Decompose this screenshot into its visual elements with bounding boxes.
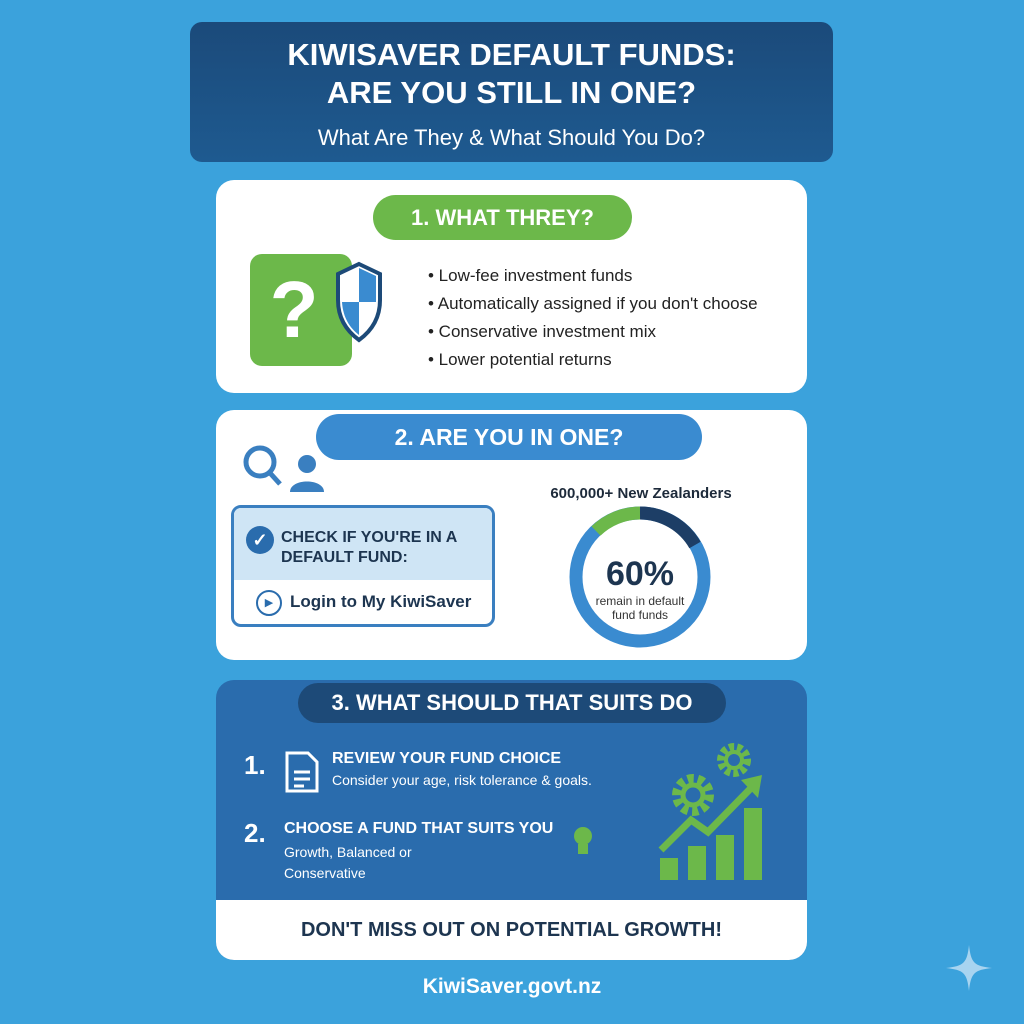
step 2: 2. [244,818,266,848]
panel 3: what should you do: Conservative [284,865,366,881]
panel 1: what are they [216,180,807,393]
check box: CHECK IF YOU'RE IN A [281,529,457,546]
title banner [190,22,833,162]
login link [256,590,282,616]
title [287,37,736,110]
bullet list [428,266,758,369]
stat label: 600,000+ New Zealanders [550,485,732,502]
donut chart [570,506,710,648]
bullet list: • Conservative investment mix [428,322,656,341]
heading pill 3 [298,683,726,723]
donut chart: 60% [606,555,674,593]
heading pill 1 [373,195,632,240]
icon: question mark [250,254,352,366]
panel 2: are you in one [216,410,807,660]
icon: check: ✓ [252,530,268,550]
bullet list: • Automatically assigned if you don't choose [428,294,758,313]
heading pill 3: 3. WHAT SHOULD THAT SUITS DO [332,690,692,715]
panel 3: what should you do: Consider your age, risk tolerance & goals. [332,772,592,788]
icon: document [286,752,318,792]
login link: ▶ [265,597,273,609]
icon: check [246,526,274,554]
step 1: 1. [244,750,266,780]
subtitle: What Are They & What Should You Do? [318,125,705,150]
donut chart: remain in default [596,594,685,608]
footer callout [216,900,807,960]
icon: question mark: ? [270,265,318,354]
footer callout: DON'T MISS OUT ON POTENTIAL GROWTH! [301,919,722,941]
icon: shield [336,262,382,342]
title: ARE YOU STILL IN ONE? [327,75,696,110]
bullet list: • Lower potential returns [428,350,612,369]
check box [231,505,495,627]
heading pill 2 [316,414,702,460]
icon: growth chart with gears [658,743,762,880]
panel 3: what should you do [216,680,807,960]
icon: lightbulb [574,827,592,854]
check box: DEFAULT FUND: [281,549,408,566]
panel 3: what should you do: REVIEW YOUR FUND CHOICE [332,750,561,767]
icon: sparkle [946,946,992,990]
heading pill 2: 2. ARE YOU IN ONE? [395,424,623,450]
bullet list: • Low-fee investment funds [428,266,632,285]
panel 3: what should you do: CHOOSE A FUND THAT SUITS YOU [284,820,553,837]
panel 3: what should you do: Growth, Balanced or [284,844,412,860]
website url: KiwiSaver.govt.nz [423,975,601,998]
title: KIWISAVER DEFAULT FUNDS: [287,37,736,72]
heading pill 1: 1. WHAT THREY? [411,205,594,230]
donut chart: fund funds [612,608,668,622]
check box: Login to My KiwiSaver [290,592,471,611]
icon: search person [244,446,324,492]
